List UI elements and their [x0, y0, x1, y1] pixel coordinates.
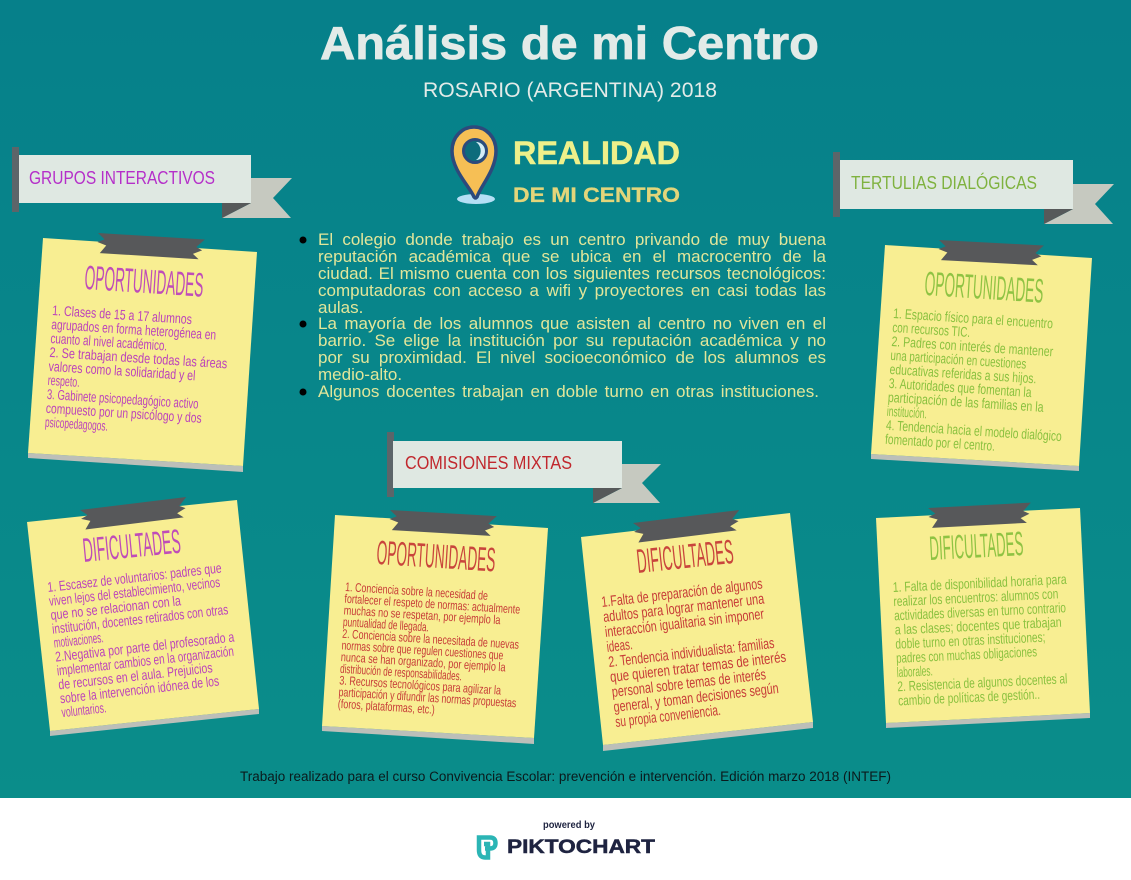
- note text: 1. Espacio físico para el encuentro: [893, 305, 1054, 331]
- note text: respeto.: [47, 372, 80, 390]
- note text: doble turno en otras instituciones;: [895, 629, 1046, 652]
- panel: comisiones mixtas oportunidades: OPORTUNIDADES: [375, 534, 497, 579]
- note text: actividades diversas en turno contrario: [894, 599, 1066, 623]
- note text: realizar los encuentros: alumnos con: [893, 585, 1059, 609]
- note text: (foros, plataformas, etc.): [337, 697, 435, 717]
- powered by label: powered by: [543, 820, 595, 831]
- panel: tertulias oportunidades: [871, 240, 1092, 471]
- note text: a las clases; docentes que trabajan: [894, 614, 1062, 638]
- note text: participación de las familias en la: [887, 389, 1044, 415]
- piktochart wordmark: PIKTOCHART: [507, 837, 655, 858]
- icon: location pin: [452, 127, 496, 204]
- note text: nunca se han organizado, por ejemplo la: [340, 650, 506, 674]
- panel: grupos interactivos dificultades: [27, 497, 259, 736]
- note text: fortalecer el respeto de normas: actualmente: [344, 592, 521, 617]
- ribbon: grupos interactivos: GRUPOS INTERACTIVOS: [29, 168, 215, 188]
- ribbon: comisiones mixtas: COMISIONES MIXTAS: [405, 453, 572, 473]
- note text: de recursos en el aula. Prejuicios: [57, 659, 213, 692]
- list bullets: [300, 236, 306, 396]
- note text: una participación en cuestiones: [890, 347, 1027, 372]
- note text: 3. Gabinete psicopedagógico activo: [46, 386, 199, 412]
- footer credit: Trabajo realizado para el curso Convivencia Escolar: prevención e intervención. Edición marzo 2018 (INTEF): [240, 769, 891, 784]
- icon: piktochart logo: [479, 838, 496, 858]
- ribbon: grupos interactivos: [12, 147, 292, 218]
- note text: educativas referidas a sus hijos.: [889, 361, 1037, 386]
- note text: [45, 302, 230, 441]
- title: Análisis de mi Centro: [320, 17, 819, 69]
- note text: psicopedagogos.: [45, 414, 108, 434]
- text block: description list: [318, 230, 826, 401]
- note text: 2. Se trabajan desde todas las áreas: [49, 344, 228, 371]
- note text: [601, 574, 792, 731]
- note text: distribución de responsabilidades.: [340, 662, 462, 683]
- text block: description list: por su proximidad. El nivel socioeconómico de los alumnos es: [318, 348, 826, 367]
- note text: 3. Autoridades que fomentan la: [888, 375, 1032, 400]
- text block: description list: medio-alto.: [318, 365, 402, 384]
- panel: comisiones mixtas dificultades: DIFICULTADES: [635, 533, 735, 581]
- note text: viven lejos del establecimiento, vecinos: [48, 574, 221, 609]
- note text: compuesto por un psicólogo y dos: [45, 400, 202, 426]
- note text: [885, 305, 1070, 458]
- panel: grupos interactivos dificultades: DIFICULTADES: [81, 523, 182, 570]
- note text: valores como la solidaridad y el: [48, 358, 196, 383]
- note text: muchas no se respetan, por ejemplo la: [343, 603, 501, 627]
- ribbon: comisiones mixtas: [387, 432, 661, 503]
- panel: tertulias dificultades: [876, 503, 1090, 728]
- panel: grupos interactivos oportunidades: OPORTUNIDADES: [83, 259, 205, 305]
- text block: description list: La mayoría de los alumnos que asisten al centro no viven en el: [318, 314, 826, 333]
- panel: comisiones mixtas oportunidades: [322, 510, 548, 744]
- note text: [47, 559, 241, 720]
- ribbon: tertulias dialogicas: TERTULIAS DIALÓGICAS: [851, 172, 1037, 193]
- subtitle: ROSARIO (ARGENTINA) 2018: [423, 79, 717, 102]
- note text: general, y toman decisiones según: [613, 680, 780, 716]
- note text: [337, 580, 523, 722]
- note text: sobre la intervención idónea de los: [59, 673, 220, 706]
- note text: ideas.: [606, 636, 633, 656]
- text block: description list: reputación académica que se ubica en el macrocentro de la: [318, 247, 826, 266]
- note text: cambio de políticas de gestión..: [898, 686, 1040, 708]
- text block: description list: barrio. Se elige la institución por su reputación académica y no: [318, 331, 826, 350]
- note text: su propia conveniencia.: [614, 702, 722, 731]
- note text: interacción igualitaria sin imponer: [604, 606, 765, 641]
- note text: normas sobre que regulen cuestiones que: [341, 638, 504, 663]
- ribbon: tertulias dialogicas: [833, 152, 1114, 224]
- note text: adultos para lograr mantener una: [602, 590, 766, 626]
- note text: laborales.: [896, 662, 933, 680]
- note text: padres con muchas obligaciones: [896, 643, 1037, 666]
- note text: 2. Resistencia de algunos docentes al: [897, 670, 1068, 694]
- note text: voluntarios.: [61, 699, 107, 720]
- heading: de mi centro: DE MI CENTRO: [513, 184, 680, 207]
- note text: 1. Conciencia sobre la necesidad de: [345, 580, 488, 603]
- note text: con recursos TIC.: [892, 319, 971, 340]
- text block: description list: ciudad. El mismo cuenta con los siguientes recursos tecnológicos:: [318, 264, 826, 283]
- text block: description list: computadoras con acceso a wifi y proyectores en casi todas las: [318, 281, 826, 300]
- note text: 1. Escasez de voluntarios: padres que: [47, 560, 222, 595]
- note text: implementar cambios en la organización: [56, 643, 235, 678]
- text block: description list: aulas.: [318, 298, 363, 317]
- white footer strip: [0, 798, 1131, 880]
- note text: que quieren tratar temas de interés: [609, 649, 787, 686]
- text block: description list: El colegio donde trabajo es un centro privando de muy buena: [318, 230, 826, 249]
- note text: 4. Tendencia hacia el modelo dialógico: [886, 417, 1062, 444]
- note text: que no se relacionan con la: [50, 592, 182, 623]
- note text: 2. Conciencia sobre la necesitada de nuevas: [342, 627, 519, 652]
- text block: description list: Algunos docentes trabajan en doble turno en otras instituciones.: [318, 382, 819, 401]
- note text: 3. Recursos tecnológicos para agilizar la: [339, 673, 502, 698]
- note text: motivaciones.: [53, 629, 104, 651]
- note text: 2. Padres con interés de mantener: [891, 333, 1054, 359]
- note text: fomentado por el centro.: [885, 431, 995, 454]
- note text: 1. Falta de disponibilidad horaria para: [892, 571, 1067, 595]
- heading: realidad: REALIDAD: [513, 135, 680, 171]
- note text: 2. Tendencia individualista: familias: [607, 635, 775, 671]
- panel: comisiones mixtas dificultades: [581, 510, 813, 751]
- note text: institución.: [886, 403, 927, 421]
- note text: 1.Falta de preparación de algunos: [601, 575, 763, 611]
- note text: personal sobre temas de interés: [611, 666, 767, 701]
- note text: 2.Negativa por parte del profesorado a: [54, 629, 235, 665]
- note text: cuanto al nivel académico.: [50, 330, 168, 353]
- note text: puntualidad de llegada.: [343, 615, 429, 634]
- note text: agrupados en forma heterogénea en: [51, 316, 217, 343]
- note text: 1. Clases de 15 a 17 alumnos: [52, 302, 193, 327]
- note text: participación y difundir las normas propuestas: [338, 685, 517, 710]
- note text: institución, docentes retirados con otras: [51, 601, 229, 637]
- note text: [892, 571, 1072, 708]
- panel: grupos interactivos oportunidades: [28, 233, 257, 472]
